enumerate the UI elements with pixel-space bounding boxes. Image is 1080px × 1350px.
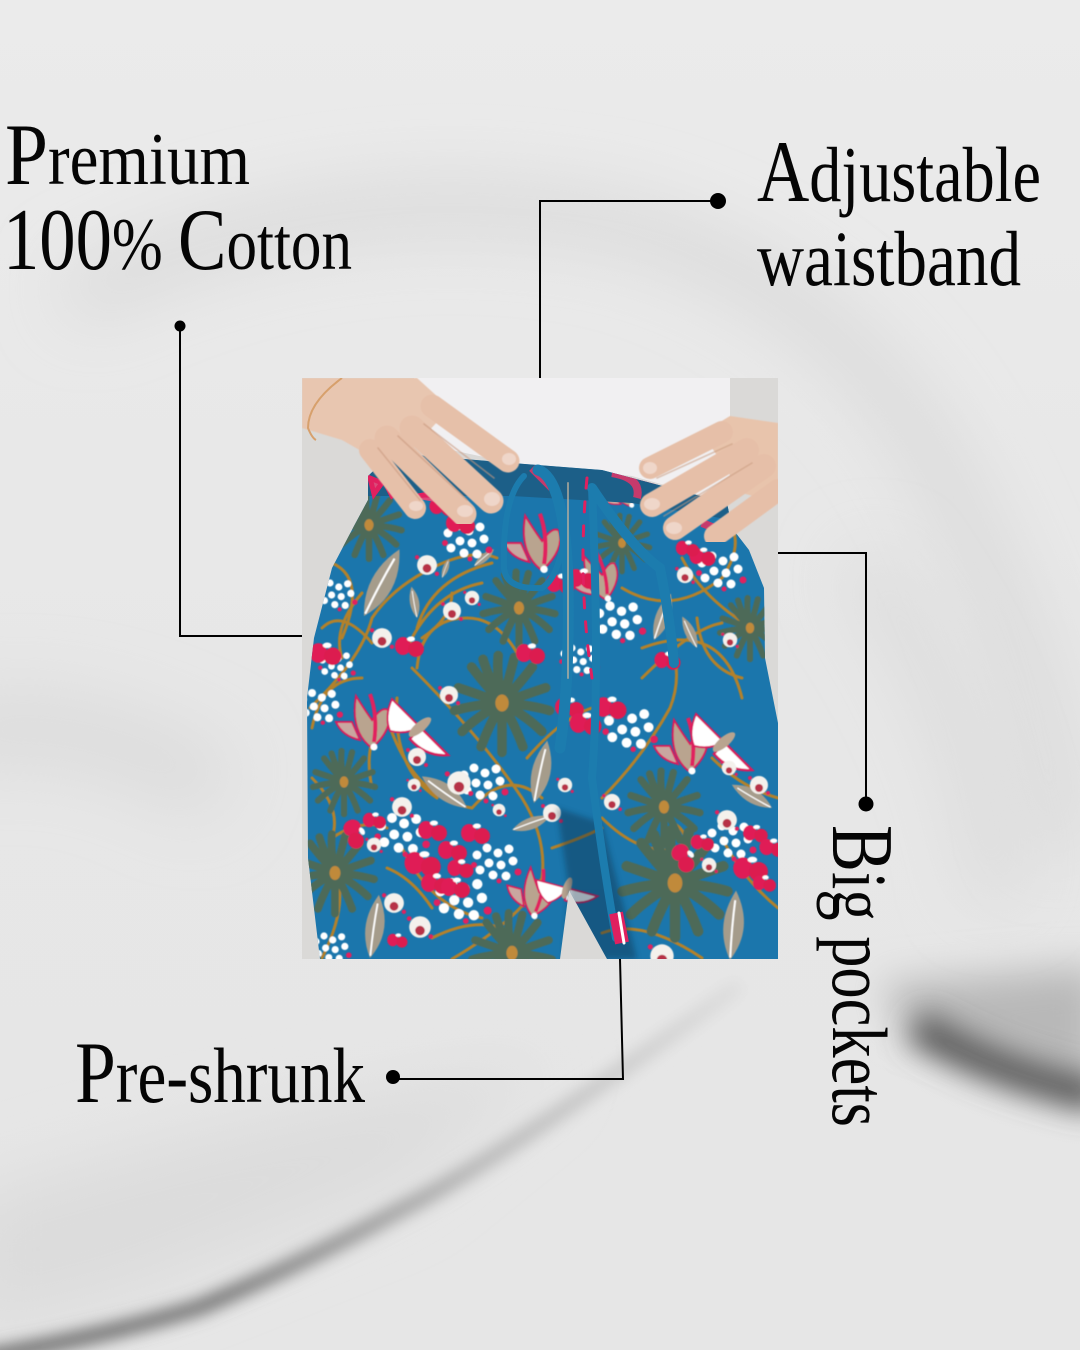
callout: big pockets bbox=[778, 553, 910, 1127]
label: adjustable waistband: waistband bbox=[757, 215, 1021, 302]
callout: adjustable waistband bbox=[540, 124, 1041, 378]
fingers, right hand bbox=[650, 432, 778, 536]
leaves bbox=[355, 545, 776, 961]
white buds bbox=[298, 522, 756, 964]
product photo: printed pants bbox=[296, 378, 786, 995]
white flowers bbox=[365, 555, 770, 969]
bracelet bbox=[308, 378, 342, 440]
callout: premium cotton bbox=[3, 107, 352, 636]
callout: pre-shrunk bbox=[75, 959, 623, 1122]
connector: big pockets bbox=[778, 553, 866, 804]
white shirt bbox=[414, 378, 730, 503]
inner leg shadow bbox=[557, 808, 637, 959]
label: premium 100% cotton: Premium bbox=[5, 107, 250, 204]
vines bbox=[310, 528, 778, 959]
pants with floral print bbox=[307, 456, 778, 959]
green fans bbox=[308, 496, 765, 959]
label: premium 100% cotton: 100% Cotton bbox=[3, 192, 352, 289]
dot: adjustable waistband bbox=[710, 193, 726, 209]
label: adjustable waistband bbox=[757, 124, 1041, 302]
connector: adjustable waistband bbox=[540, 201, 718, 378]
butterflies bbox=[336, 467, 752, 923]
left hand bbox=[302, 378, 516, 517]
red flowers bbox=[310, 471, 786, 948]
dot: big pockets bbox=[858, 796, 874, 812]
label: premium 100% cotton bbox=[3, 107, 352, 289]
connector: premium cotton bbox=[180, 326, 302, 636]
drawstring tie bbox=[504, 470, 674, 943]
label: pre-shrunk: Pre-shrunk bbox=[75, 1025, 365, 1122]
fingers, left hand bbox=[370, 406, 508, 514]
connector: pre-shrunk bbox=[393, 959, 623, 1079]
right hand bbox=[643, 416, 778, 536]
dot: premium cotton bbox=[174, 320, 186, 332]
label: big pockets: Big pockets bbox=[813, 825, 910, 1127]
photo backdrop bbox=[302, 378, 778, 959]
waistband gathers bbox=[368, 453, 732, 533]
dot: pre-shrunk bbox=[386, 1070, 400, 1084]
